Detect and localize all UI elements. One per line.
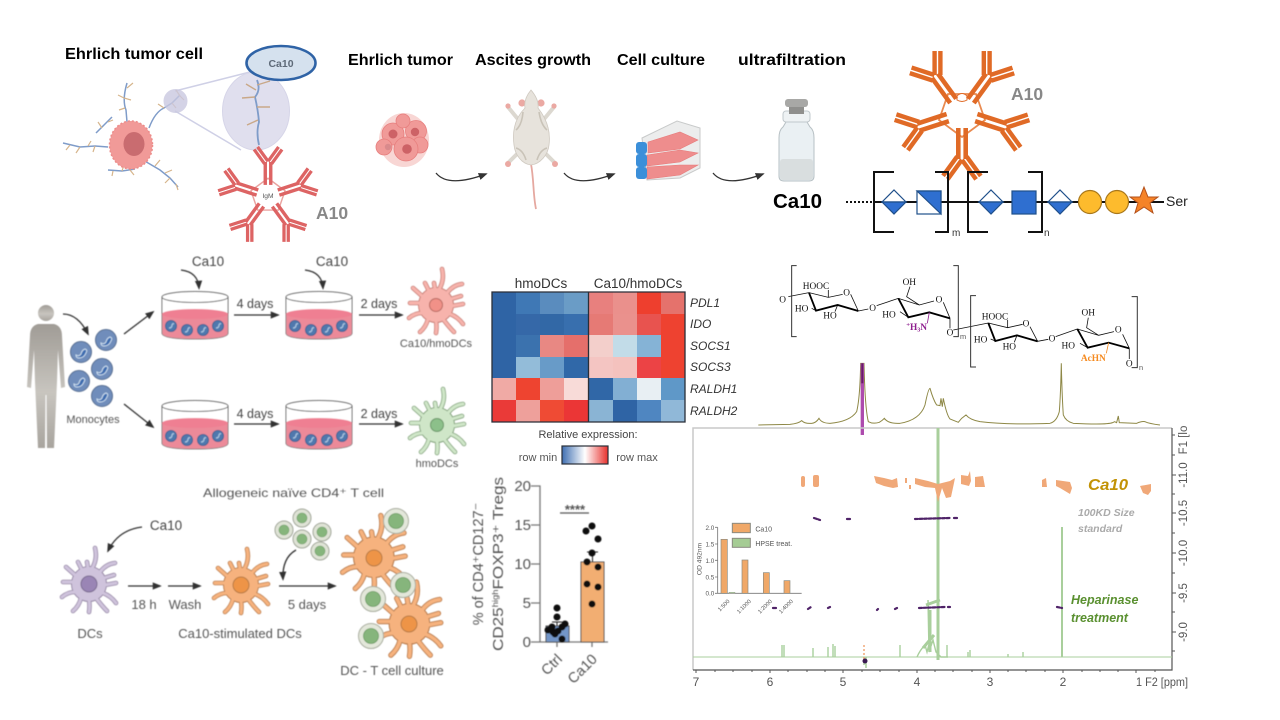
- x axis labels: 7: [693, 675, 700, 689]
- label: m subscript: m: [960, 332, 966, 341]
- inset y label: OD 492nm: [696, 542, 703, 575]
- icon: top dish 2: [286, 292, 352, 339]
- label: Ca10 first: Ca10: [192, 254, 224, 269]
- purple marker bar: [861, 363, 864, 435]
- chart: Tregs bar chart: [471, 477, 608, 687]
- y axis labels: -9.5: [1178, 583, 1190, 603]
- arrow: Ca10 into dish 2: [305, 270, 323, 288]
- icon: vial: [779, 99, 814, 181]
- chart: 2D NMR panel: [693, 426, 1190, 689]
- y axis labels: -10.5: [1178, 500, 1190, 526]
- label: H3N purple: 3: [917, 327, 920, 333]
- x axis labels: [693, 675, 1188, 689]
- significance bar: [560, 512, 589, 514]
- ring atoms and labels: HO: [1062, 341, 1075, 351]
- ring atoms and labels: HO: [795, 305, 809, 315]
- inset tick labels: [706, 525, 715, 598]
- label: Monocytes: Monocytes: [66, 414, 120, 426]
- ring atoms and labels: HOOC: [982, 312, 1008, 322]
- icon: mouse: [505, 90, 558, 209]
- icon: bottom dish 2: [286, 400, 352, 449]
- label: n subscript: n: [1139, 363, 1143, 372]
- y tick labels: [514, 478, 531, 651]
- plot axes dark: [693, 428, 1172, 670]
- icon: yellow circles: [1078, 190, 1128, 214]
- label: H3N purple: H: [910, 323, 918, 333]
- data points: [544, 522, 602, 642]
- icon: orange DC: [214, 549, 268, 613]
- ring atoms and labels: O: [869, 304, 876, 314]
- y tick labels: 15: [514, 517, 531, 534]
- heading: ultrafiltration: ultrafiltration: [738, 52, 846, 69]
- label: H3N purple: N: [920, 323, 927, 333]
- inset axes: [715, 527, 802, 593]
- label: Ser: Ser: [1166, 193, 1188, 209]
- ring atoms and labels: O: [779, 295, 786, 305]
- label: Wash: Wash: [169, 597, 201, 612]
- icon: diamond 3: [1048, 190, 1072, 214]
- gene labels: IDO: [690, 317, 711, 331]
- label: row max: row max: [616, 452, 658, 464]
- arrow: human to monocytes: [63, 314, 88, 334]
- label: m: m: [952, 228, 960, 239]
- inset tick labels: 2.0: [706, 525, 715, 532]
- purple water blob: [862, 658, 868, 664]
- icon: DC-T cell culture: [343, 508, 441, 656]
- orange artefact near water peak: [863, 645, 865, 660]
- arrow: 2 days bottom: [359, 423, 402, 425]
- label: Ca10 NMR: Ca10: [1088, 477, 1128, 494]
- significance stars: ****: [565, 502, 586, 517]
- arrow: T cells to culture: [283, 550, 296, 579]
- label: hmoDCs: hmoDCs: [416, 458, 459, 470]
- ring atoms and labels: O: [1049, 335, 1056, 345]
- label: 18 h: 18 h: [131, 597, 157, 612]
- icon: top dish 1: [162, 292, 228, 339]
- dotted lead: [846, 201, 873, 203]
- gene labels: RALDH2: [690, 404, 738, 418]
- heading: Cell culture: Cell culture: [617, 52, 705, 69]
- icon: zoomed glycan ellipse: [222, 72, 290, 150]
- ring atoms and labels: OH: [1082, 309, 1095, 319]
- panel: production workflow: [348, 52, 846, 213]
- chart: 1H NMR spectrum: [758, 363, 1160, 435]
- bar: Ca10: [581, 562, 604, 642]
- icon: blue square: [1012, 191, 1036, 214]
- panel: monocyte differentiation workflow: [27, 254, 473, 470]
- label: 100KD Size standard: 100KD Size: [1078, 507, 1135, 519]
- label: hmoDCs column: hmoDCs: [515, 276, 568, 291]
- heatmap cells: [492, 292, 685, 422]
- icon: tumor cell: [110, 121, 152, 169]
- bond orange: [1106, 343, 1109, 353]
- y axis title line 2: FOXP3⁺ Tregs: [491, 477, 507, 590]
- icon: zoom circle: [164, 89, 188, 113]
- icon: half square: [917, 191, 941, 214]
- label: Heparinase treatment: Heparinase: [1071, 593, 1138, 607]
- heading: Ehrlich tumor: Ehrlich tumor: [348, 52, 453, 69]
- label: 2 days top: 2 days: [361, 297, 397, 311]
- inset x labels: 1:1000: [736, 599, 753, 615]
- arrow: tumor to mouse: [436, 173, 486, 181]
- icon: IgM antibody red: [216, 146, 320, 246]
- inset x labels: 1:4000: [778, 599, 795, 615]
- label: A10: A10: [316, 203, 348, 223]
- label: H3N purple: +: [906, 322, 910, 329]
- y axis labels: [1178, 426, 1190, 642]
- ring atoms and labels: HOOC: [803, 282, 829, 292]
- icon: hmoDC cell: [410, 389, 464, 453]
- arrow: Wash: [168, 585, 200, 587]
- heading: Ehrlich tumor cell: Ehrlich tumor cell: [65, 46, 203, 63]
- arrow: to bottom branch: [124, 404, 153, 427]
- y tick labels: 10: [514, 556, 531, 573]
- bonds bold front: [809, 293, 1129, 348]
- green trace: heparinase spectrum: [693, 428, 1172, 668]
- axis ticks: [696, 435, 1176, 673]
- y tick labels: 20: [514, 478, 531, 495]
- icon: human silhouette: [27, 305, 65, 448]
- arrow: 18 h: [128, 585, 160, 587]
- purple signals: [773, 518, 1062, 610]
- inset green bar: [729, 591, 735, 594]
- heatmap frame: [492, 292, 685, 422]
- icon: Ca10 ellipse label: Ca10: [268, 58, 294, 70]
- gene labels: SOCS3: [690, 360, 731, 374]
- label: 5 days: 5 days: [288, 597, 327, 612]
- label: n: n: [1044, 228, 1050, 239]
- x axis labels: 4: [914, 675, 921, 689]
- icon: glycan chains on tumor cell: [63, 83, 184, 190]
- icon: cell culture flasks: [636, 121, 700, 180]
- ring atoms and labels: HO: [974, 335, 988, 345]
- label: Ca10: Ca10: [150, 518, 182, 533]
- ring atoms and labels: O: [843, 289, 850, 299]
- y axis labels: -9.0: [1178, 622, 1190, 642]
- x axis labels: 1 F2 [ppm]: [1136, 675, 1188, 689]
- label: 2 days bottom: 2 days: [361, 407, 397, 421]
- legend Ca10 label: Ca10: [755, 527, 772, 534]
- ring atoms and labels: O: [1126, 360, 1133, 370]
- y tick labels: 0: [523, 634, 531, 651]
- arrow: to top branch: [124, 312, 153, 334]
- inset tick labels: 0.5: [706, 574, 715, 581]
- label: row min: row min: [519, 452, 557, 464]
- label: DC - T cell culture: DC - T cell culture: [340, 663, 444, 678]
- error bars: [552, 552, 598, 626]
- arrow: Ca10 to DC: [108, 527, 142, 551]
- x label Ca10: Ca10: [565, 652, 601, 687]
- bar: Ctrl: [546, 626, 569, 642]
- label: DCs: DCs: [77, 626, 103, 641]
- label: 100KD Size standard: standard: [1078, 523, 1123, 535]
- icon: orange star: [1130, 187, 1158, 213]
- inset bars: [721, 539, 790, 593]
- ring atoms and labels: [779, 278, 1133, 370]
- icon: callout wedge lines: [175, 72, 250, 150]
- bonds thin: [788, 287, 1129, 359]
- spectrum trace: [758, 363, 1160, 425]
- label: A10 orange antibody: A10: [1011, 84, 1043, 104]
- icon: tumor cell cluster: [376, 113, 429, 167]
- ring atoms and labels: OH: [903, 278, 916, 288]
- ring atoms and labels: O: [1115, 325, 1122, 335]
- inset tick labels: 1.0: [706, 558, 715, 565]
- inset tick labels: 1.5: [706, 541, 715, 548]
- y axis title line 2: CD25: [491, 614, 507, 651]
- icon: T cells group: [275, 509, 331, 560]
- y tick labels: 5: [523, 595, 531, 612]
- arrow: 2 days top: [359, 314, 402, 316]
- x label Ctrl: Ctrl: [539, 652, 566, 679]
- legend HPSE: [732, 538, 750, 547]
- inset x labels: 1:500: [717, 599, 731, 613]
- label: Ca10/hmoDCs: Ca10/hmoDCs: [400, 338, 473, 350]
- label: Ca10/hmoDCs column: Ca10/hmoDCs: [594, 276, 683, 291]
- arrow: 5 days: [279, 585, 335, 587]
- label: 4 days top: 4 days: [237, 297, 273, 311]
- icon: orange A10 antibody: [891, 46, 1033, 181]
- label: Allogeneic naive CD4+ T cell: Allogeneic naïve CD4⁺ T cell: [203, 486, 384, 500]
- y axis title line 2: high: [491, 590, 500, 607]
- icon: IgM antibody red: IgM: [262, 193, 274, 200]
- ring atoms and labels: HO: [1003, 342, 1016, 352]
- label: Ca10-stimulated DCs: Ca10-stimulated DCs: [178, 626, 302, 641]
- icon: bottom dish 1: [162, 400, 228, 449]
- arrow: mouse to flasks: [564, 173, 614, 181]
- ring atoms and labels: O: [1023, 320, 1030, 330]
- x axis labels: 3: [987, 675, 994, 689]
- icon: monocyte cells: [68, 330, 116, 406]
- x axis labels: 2: [1060, 675, 1067, 689]
- label: Relative expression: Relative expression:: [538, 429, 638, 441]
- gene labels: PDL1: [690, 296, 720, 310]
- panel: DC T-cell co-culture workflow: [62, 486, 444, 678]
- color scale: [562, 446, 608, 464]
- brackets m and n: [874, 172, 1042, 232]
- icon: purple DC: [62, 548, 116, 612]
- label: Ca10: Ca10: [773, 191, 822, 213]
- glycan backbone line: [873, 201, 1164, 203]
- inset tick labels: 0.0: [706, 591, 715, 598]
- orange Ca10 signal: [801, 471, 1151, 502]
- ring atoms and labels: HO: [823, 311, 837, 321]
- label: AcHN orange: AcHN: [1081, 354, 1106, 364]
- gene labels: [690, 296, 738, 418]
- heading: Ascites growth: Ascites growth: [475, 52, 591, 69]
- arrow: 4 days top: [234, 314, 278, 316]
- y axis labels: F1 [lo: [1178, 426, 1190, 454]
- icon: Ca10/hmoDC cell: [409, 269, 463, 333]
- arrow: 4 days bottom: [234, 423, 278, 425]
- arrow: flasks to vial: [713, 173, 763, 181]
- x axis labels: 6: [767, 675, 774, 689]
- y axis title line 1: % of CD4⁺CD127⁻: [471, 503, 487, 625]
- inset x labels: [717, 599, 795, 615]
- gene labels: SOCS1: [690, 339, 731, 353]
- icon: Ca10 ellipse label: [246, 46, 316, 80]
- ring atoms and labels: O: [936, 295, 943, 305]
- legend HPSE label: HPSE treat.: [755, 541, 792, 548]
- diagram: glycan chain: [846, 172, 1188, 239]
- brackets: [792, 266, 1137, 368]
- diagram: chemical structure: [779, 266, 1143, 372]
- y axis labels: -10.0: [1178, 540, 1190, 566]
- label: Ca10 second: Ca10: [316, 254, 348, 269]
- arrow: Ca10 into dish 1: [181, 270, 199, 288]
- axes: [531, 486, 608, 647]
- ring atoms and labels: HO: [882, 311, 896, 321]
- inset x labels: 1:2000: [757, 599, 774, 615]
- legend Ca10: [732, 523, 750, 533]
- gene labels: RALDH1: [690, 382, 737, 396]
- panel: Ehrlich tumor cell and A10 antibody: [63, 46, 348, 246]
- ring atoms and labels: O: [947, 329, 954, 339]
- label: 4 days bottom: 4 days: [237, 407, 273, 421]
- purple marker core: [861, 363, 863, 383]
- icon: diamond 2: [979, 190, 1003, 214]
- label: Heparinase treatment: treatment: [1071, 611, 1129, 625]
- chart: gene expression heatmap: [492, 276, 738, 464]
- x axis labels: 5: [840, 675, 847, 689]
- plot frame: [693, 428, 1172, 670]
- chart: inset ELISA bars: [696, 523, 802, 615]
- icon: diamond 1: [882, 190, 906, 214]
- y axis labels: -11.0: [1178, 462, 1190, 488]
- bond purple: [927, 312, 929, 323]
